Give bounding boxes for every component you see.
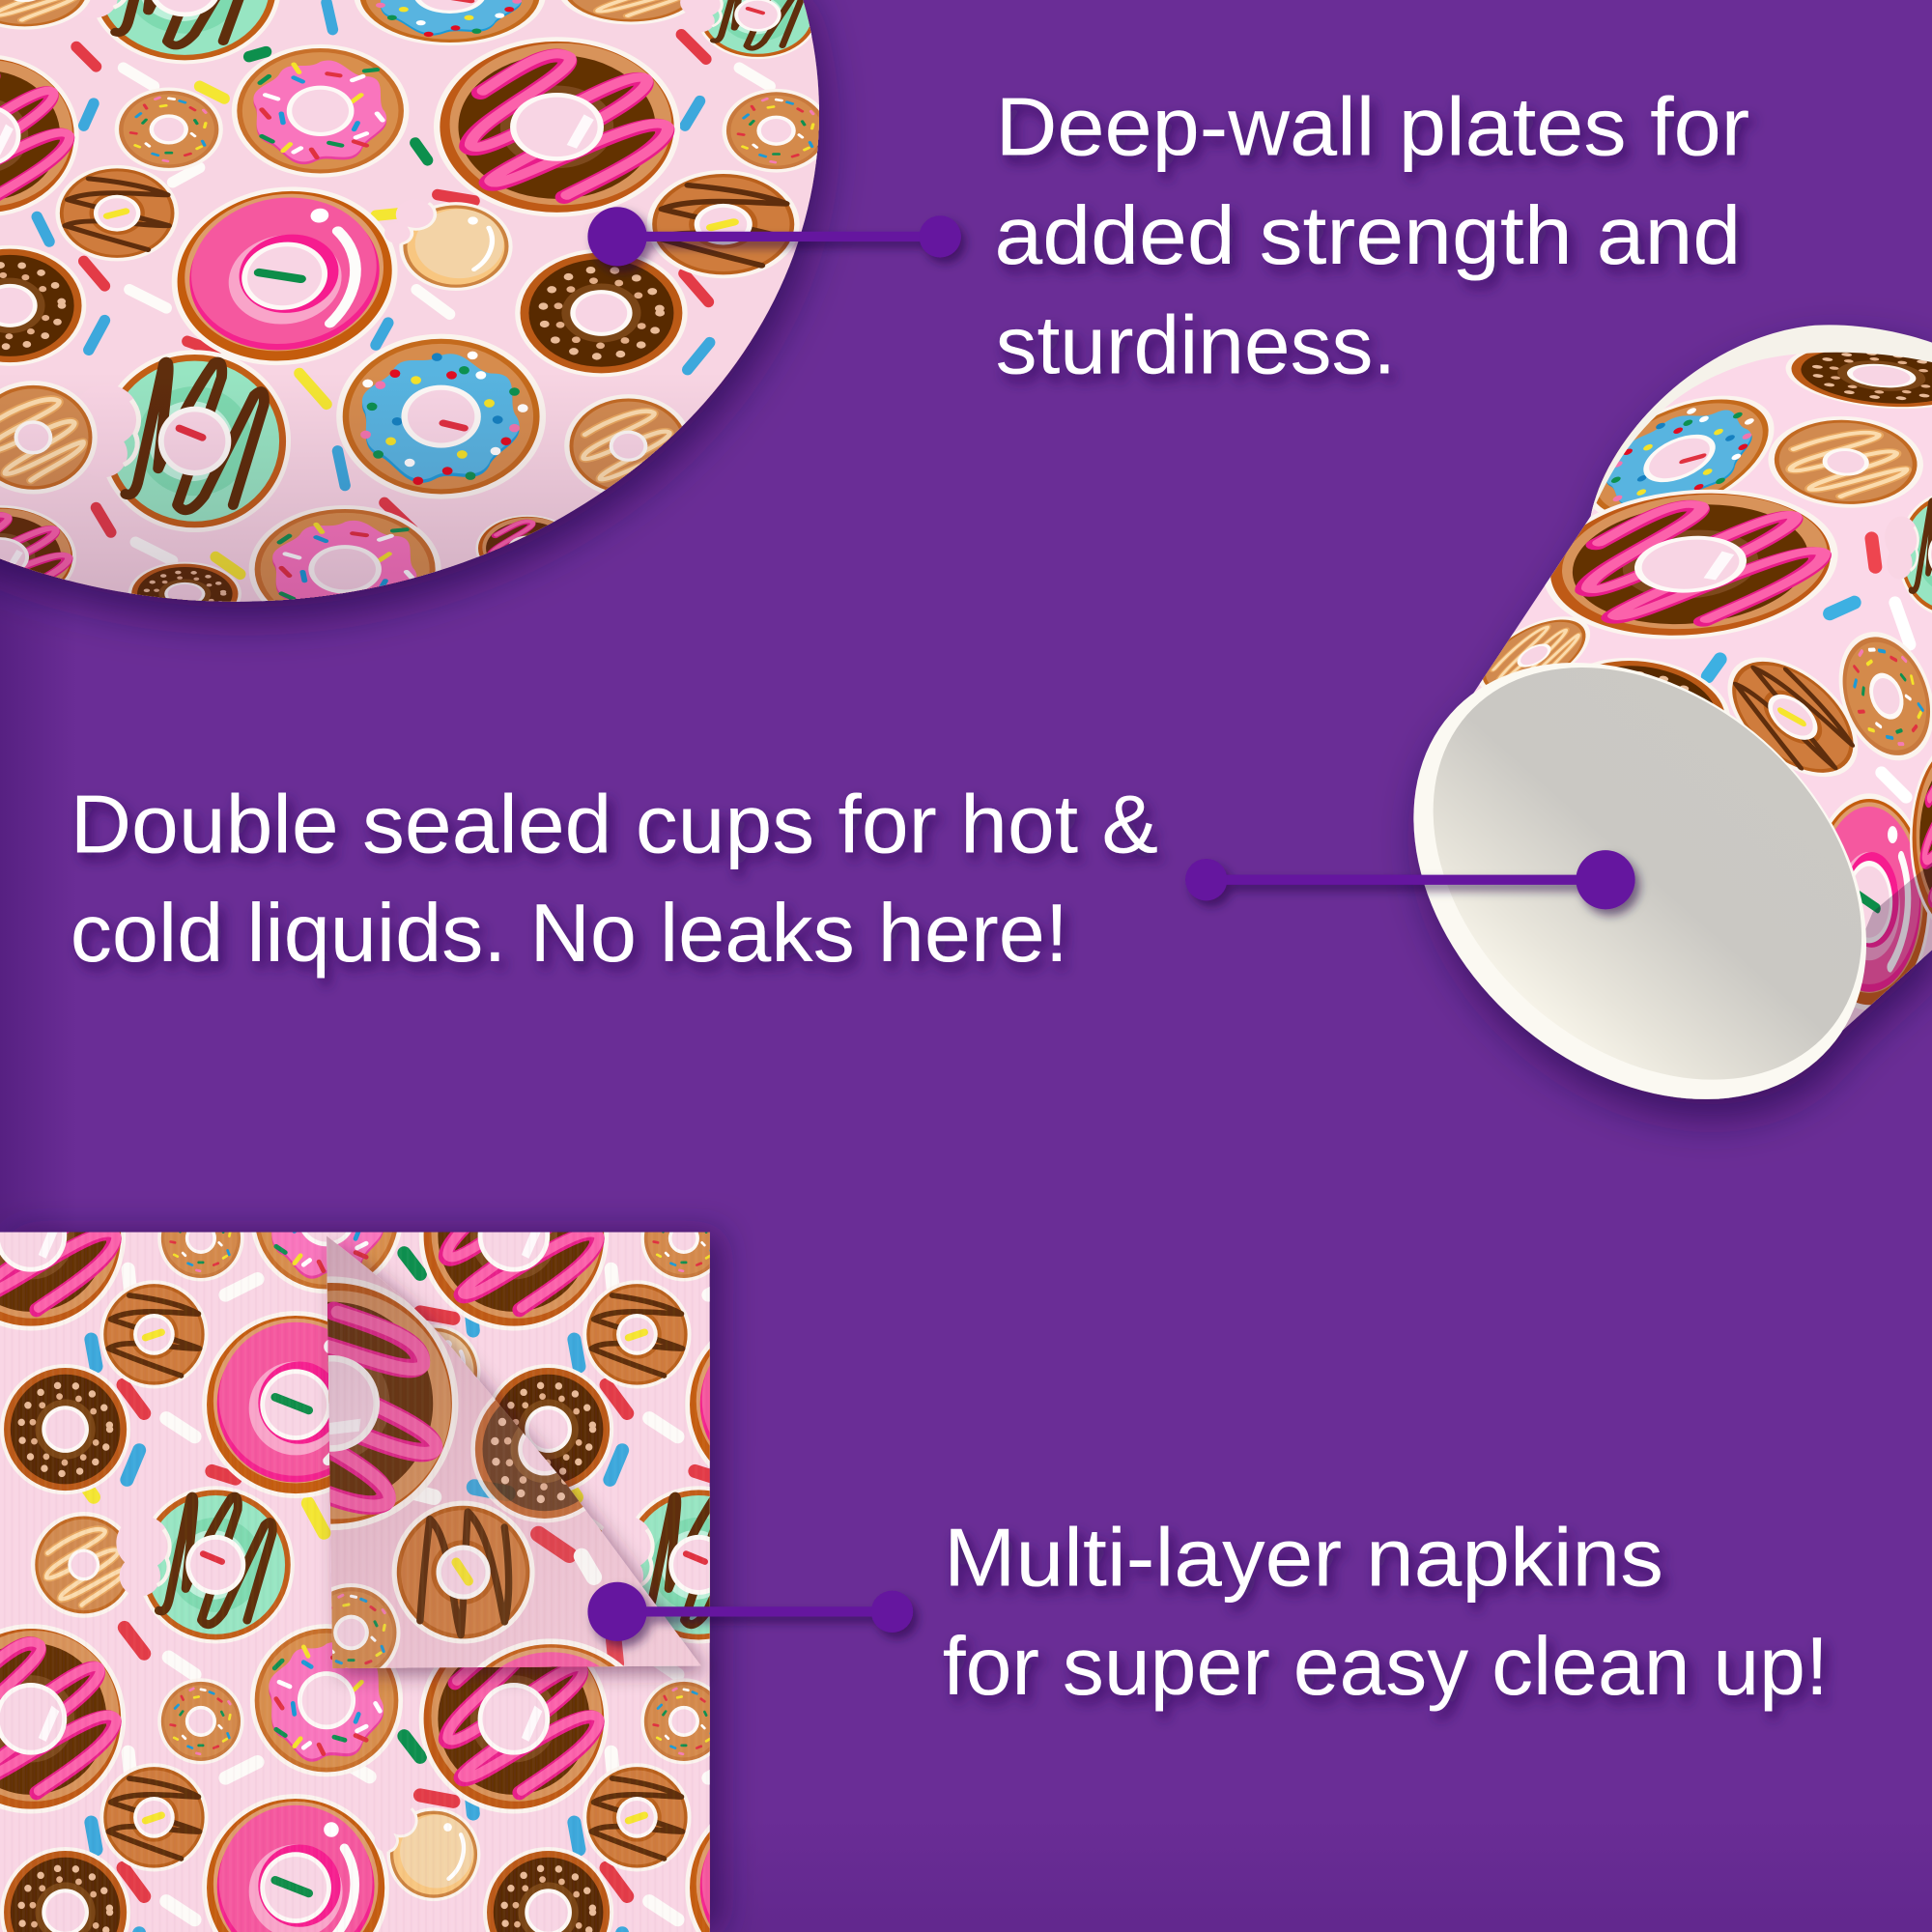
text: cups feature (71, 780, 1158, 980)
napkin donut pattern (0, 1233, 710, 1932)
text: cups feature: Double sealed cups for hot & (71, 780, 1158, 871)
flap donuts (327, 1276, 624, 1668)
text: cups feature: cold liquids. No leaks here! (71, 888, 1068, 980)
flap sprinkles (409, 1488, 616, 1663)
napkin folded corner (321, 1236, 710, 1690)
text: plates feature: Deep-wall plates for (996, 82, 1749, 174)
text: napkins feature: for super easy clean up! (943, 1621, 1829, 1713)
panel: paper plate (0, 0, 850, 634)
plate sprinkles (37, 3, 770, 574)
text: plates feature: added strength and (994, 190, 1741, 282)
callout connector: plate (587, 207, 961, 267)
cup sprinkles (1708, 538, 1910, 797)
panel: paper napkin (0, 1215, 740, 1932)
cup body (1441, 321, 1932, 1084)
callout connector: cup (1185, 850, 1635, 909)
text: plates feature (994, 82, 1749, 391)
text: plates feature: sturdiness. (996, 299, 1396, 391)
cup bottom (1326, 574, 1932, 1188)
text: napkins feature (943, 1513, 1829, 1713)
text: napkins feature: Multi-layer napkins (944, 1513, 1663, 1605)
callout connector: napkin (587, 1582, 913, 1641)
plate donuts (0, 0, 831, 634)
cup rim (1591, 325, 1932, 516)
cup donuts (1465, 335, 1932, 1010)
panel: paper cup (1326, 321, 1932, 1188)
